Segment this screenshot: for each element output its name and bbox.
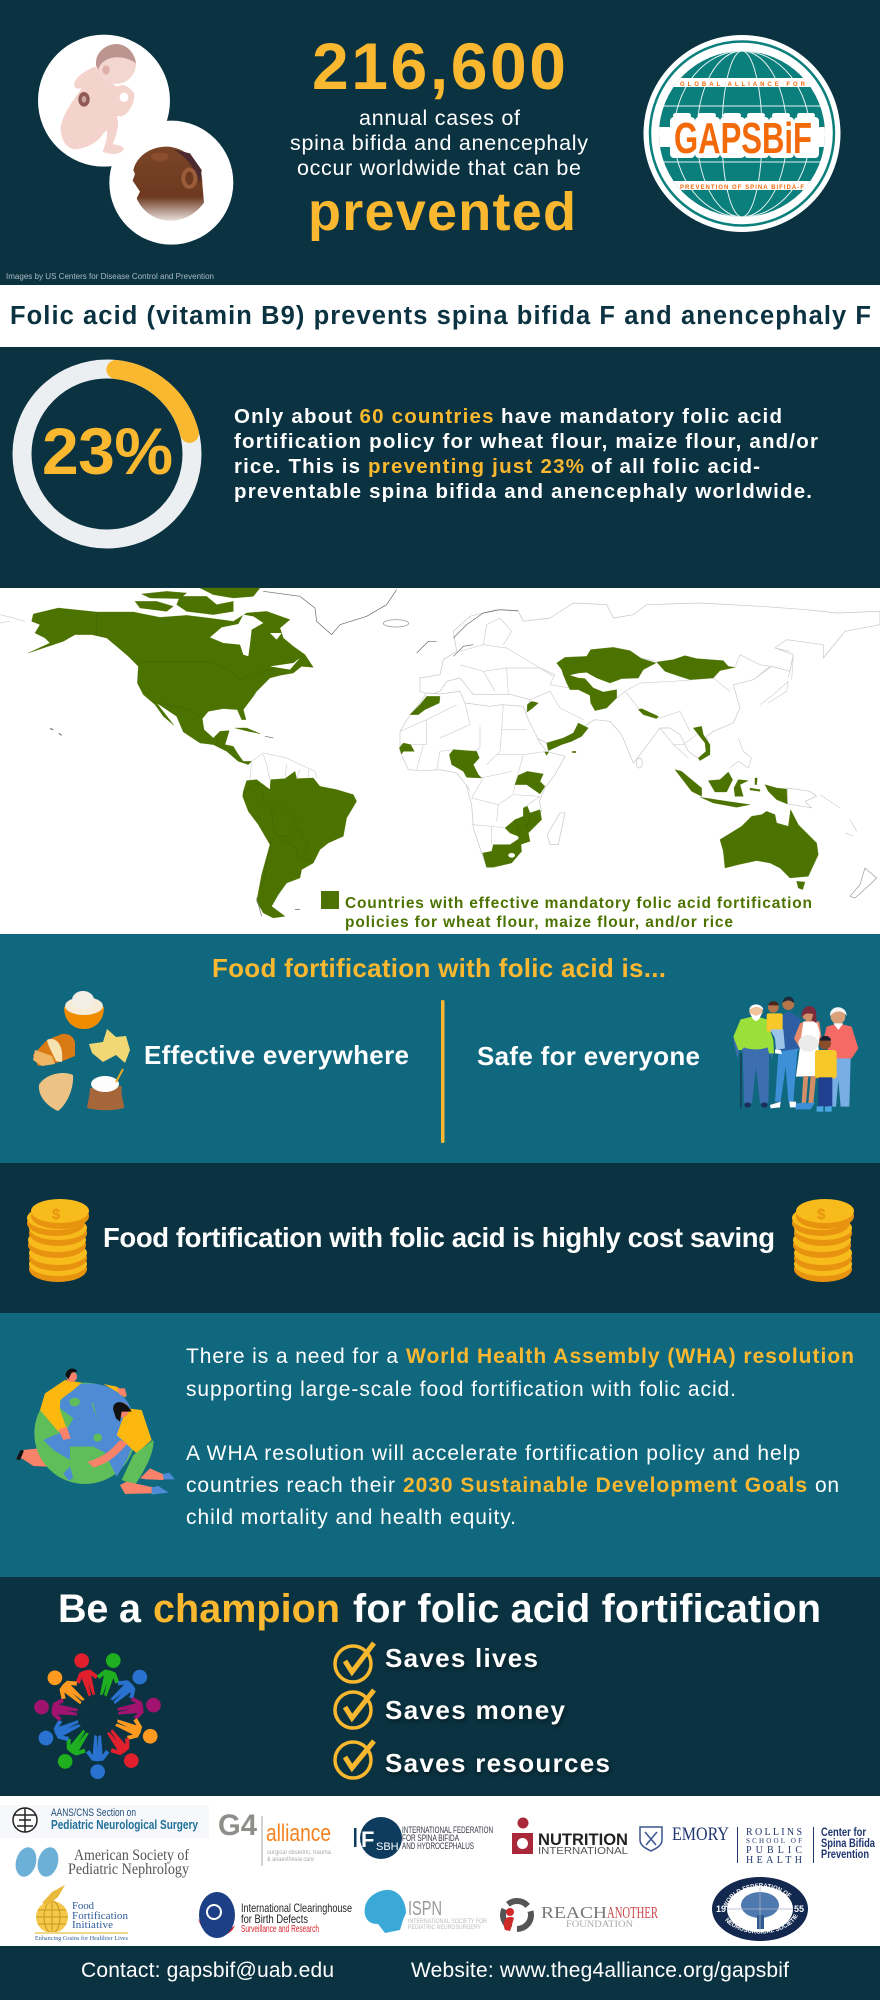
text: WHA resolution: 2030 Sustainable Development Goals [403, 1474, 807, 1497]
donut chart: 23% [22, 369, 192, 539]
logo: WFNS: NEUROSURGICAL SOCIETIES [725, 1914, 798, 1934]
divider [441, 1000, 444, 1143]
logo: Nutrition International: INTERNATIONAL [538, 1846, 628, 1857]
saves resources: Saves resources [385, 1748, 610, 1778]
text: annual cases: spina bifida and anencephaly [290, 131, 588, 155]
text: policy coverage [234, 405, 818, 503]
logo: IFSBH: SBH [376, 1841, 399, 1853]
heading: champion: champion [153, 1587, 340, 1631]
logo: Nutrition International [512, 1818, 628, 1857]
heading: champion [58, 1587, 821, 1631]
donut chart: 23%: 23% [42, 414, 173, 488]
heading: champion: Be a [58, 1587, 142, 1631]
big number: 216,600 [312, 29, 566, 103]
logo: WFNS: 19 [716, 1904, 726, 1914]
logo: G4 alliance: G4 [218, 1809, 257, 1842]
panel: world map [0, 588, 880, 934]
text: WHA resolution: supporting large-scale food fortification with folic acid. [186, 1378, 736, 1401]
panel: cost saving [0, 1163, 880, 1313]
icon: coin stack right: $ [817, 1206, 826, 1223]
logo: Emory Rollins: PUBLIC [746, 1845, 802, 1856]
saves lives: Saves lives [385, 1643, 538, 1673]
text: cost saving: Food fortification with folic acid is highly cost saving [103, 1222, 775, 1253]
logo: AANS/CNS: AANS/CNS Section on [51, 1807, 136, 1819]
logo: GAPSBiF: GAPSBiF [674, 114, 812, 163]
icon: coin stack left [27, 1199, 89, 1282]
text: annual cases [290, 106, 588, 180]
panel: effective and safe [0, 934, 880, 1163]
text: WHA resolution: A WHA resolution will accelerate fortification policy and help [186, 1442, 800, 1465]
saves money: Saves money [385, 1695, 566, 1725]
label: safe: Safe for everyone [477, 1041, 700, 1071]
image credit: Images by US Centers for Disease Control and Prevention [6, 272, 214, 281]
banner text: Folic acid (vitamin B9) prevents spina bifida F and anencephaly F [10, 302, 871, 330]
panel: WHA resolution [0, 1313, 880, 1577]
logo: Emory Rollins: Center for [821, 1825, 866, 1839]
word: prevented: prevented [308, 182, 576, 242]
text: WHA resolution [186, 1345, 854, 1529]
logo: GAPSBiF: GLOBAL ALLIANCE FOR [680, 82, 806, 88]
icon: check saves lives [335, 1643, 374, 1682]
map: Africa, Eurasia and Oceania [399, 603, 880, 898]
text: WHA resolution: countries reach their [186, 1474, 395, 1497]
legend [321, 891, 812, 931]
icon: spina bifida and anencephaly illustrations [38, 35, 233, 245]
text: policy coverage: of all folic acid- [591, 455, 760, 478]
heading: Food fortification with folic acid is... [212, 953, 666, 983]
logo: ISPN: PEDIATRIC NEUROSURGERY [408, 1924, 482, 1931]
logo: AANS/CNS [0, 1805, 209, 1838]
icon: family [733, 996, 858, 1112]
logo: IFSBH: INTERNATIONAL FEDERATION [402, 1825, 493, 1835]
logo: GAPSBiF [644, 35, 840, 232]
logo: Emory Rollins: ROLLINS [746, 1827, 802, 1838]
logo: Food Fortification Initiative: Food [72, 1900, 94, 1912]
label: effective: Effective everywhere [144, 1040, 409, 1070]
website: Website: www.theg4alliance.org/gapsbif [411, 1959, 789, 1982]
logo: Emory Rollins: HEALTH [746, 1855, 802, 1866]
logo: Emory Rollins: SCHOOL OF [746, 1837, 802, 1845]
logo: American Society of Pediatric Nephrology [12, 1845, 190, 1879]
logo: Food Fortification Initiative: Initiative [72, 1919, 113, 1931]
heading: champion: for folic acid fortification [353, 1587, 821, 1631]
logo: ISPN: ISPN [408, 1898, 442, 1920]
panel: 23 percent [0, 347, 880, 588]
icon: food staples [33, 991, 130, 1111]
map: Americas [0, 588, 437, 918]
text: policy coverage: have mandatory folic acid [501, 405, 782, 428]
text: annual cases: occur worldwide that can be [297, 156, 581, 180]
logo: ISPN [365, 1890, 487, 1933]
text: policy coverage: preventable spina bifida and anencephaly worldwide. [234, 480, 812, 503]
logo: WFNS: WORLD FEDERATION OF [723, 1883, 792, 1907]
logo: G4 alliance: surgical obstetric, trauma [267, 1849, 331, 1856]
logo: G4 alliance [218, 1809, 331, 1866]
icon: check saves resources [335, 1741, 374, 1778]
logo: Nutrition International: NUTRITION [538, 1830, 628, 1849]
text: WHA resolution: on [815, 1474, 839, 1497]
logo: Reach Another Foundation: FOUNDATION [566, 1919, 634, 1929]
logo: Clearinghouse for Birth Defects: for Birth Defects [241, 1912, 308, 1926]
logo: Clearinghouse for Birth Defects: International Clearinghouse [241, 1901, 352, 1915]
logo: IFSBH: FOR SPINA BIFIDA [402, 1833, 459, 1843]
text: policy coverage: fortification policy for wheat flour, maize flour, and/or [234, 430, 818, 453]
legend: Countries with effective mandatory folic acid fortification [345, 895, 812, 912]
panel: folic acid banner [0, 285, 880, 347]
logo: Reach Another Foundation: ANOTHER [607, 1903, 658, 1922]
text: annual cases: annual cases of [359, 106, 520, 130]
logo: Food Fortification Initiative [35, 1885, 129, 1942]
text: policy coverage: Only about [234, 405, 352, 428]
logo: Clearinghouse for Birth Defects: Surveillance and Research [241, 1924, 319, 1935]
logo: American Society of Pediatric Nephrology: American Society of [74, 1847, 190, 1864]
logo: Clearinghouse for Birth Defects [198, 1892, 352, 1938]
panel: header [6, 34, 840, 280]
panel: footer contact [0, 1946, 880, 2000]
logo: Food Fortification Initiative: Fortification [72, 1910, 128, 1922]
text: policy coverage: 60 countries [360, 405, 494, 428]
text: WHA resolution: child mortality and health equity. [186, 1506, 516, 1529]
text: WHA resolution: World Health Assembly (WHA) resolution [406, 1345, 854, 1368]
logo: Reach Another Foundation [503, 1901, 658, 1931]
logo: AANS/CNS: Pediatric Neurological Surgery [51, 1817, 199, 1832]
logo: American Society of Pediatric Nephrology: Pediatric Nephrology [68, 1861, 189, 1878]
logo: Emory Rollins [640, 1824, 875, 1866]
logo: IFSBH: F [361, 1827, 374, 1852]
icon: check saves money [335, 1690, 374, 1728]
text: policy coverage: preventing just 23% [368, 455, 584, 478]
logo: IFSBH: AND HYDROCEPHALUS [402, 1841, 474, 1851]
logo: GAPSBiF: PREVENTION OF SPINA BIFIDA-F [680, 185, 804, 191]
icon: coin stack right [792, 1199, 854, 1282]
legend: policies for wheat flour, maize flour, and/or rice [345, 914, 733, 931]
logo: G4 alliance: & anaesthesia care [267, 1856, 314, 1863]
panel: be a champion [0, 1577, 880, 1796]
icon: coin stack left: $ [52, 1206, 61, 1223]
contact email: Contact: gapsbif@uab.edu [81, 1959, 334, 1982]
logo: Food Fortification Initiative: Enhancing Grains for Healthier Lives [35, 1935, 129, 1942]
logo: WFNS: 55 [794, 1904, 804, 1914]
icon: people hugging globe [16, 1369, 175, 1495]
logo: IFSBH [354, 1817, 493, 1859]
logo: Reach Another Foundation: REACH [541, 1903, 607, 1922]
text: policy coverage: rice. This is [234, 455, 360, 478]
icon: ring of people [33, 1650, 163, 1779]
text: WHA resolution: There is a need for a [186, 1345, 398, 1368]
logo: Emory Rollins: EMORY [672, 1824, 729, 1845]
logo: G4 alliance: alliance [266, 1820, 331, 1847]
logo: ISPN: INTERNATIONAL SOCIETY FOR [408, 1918, 487, 1925]
